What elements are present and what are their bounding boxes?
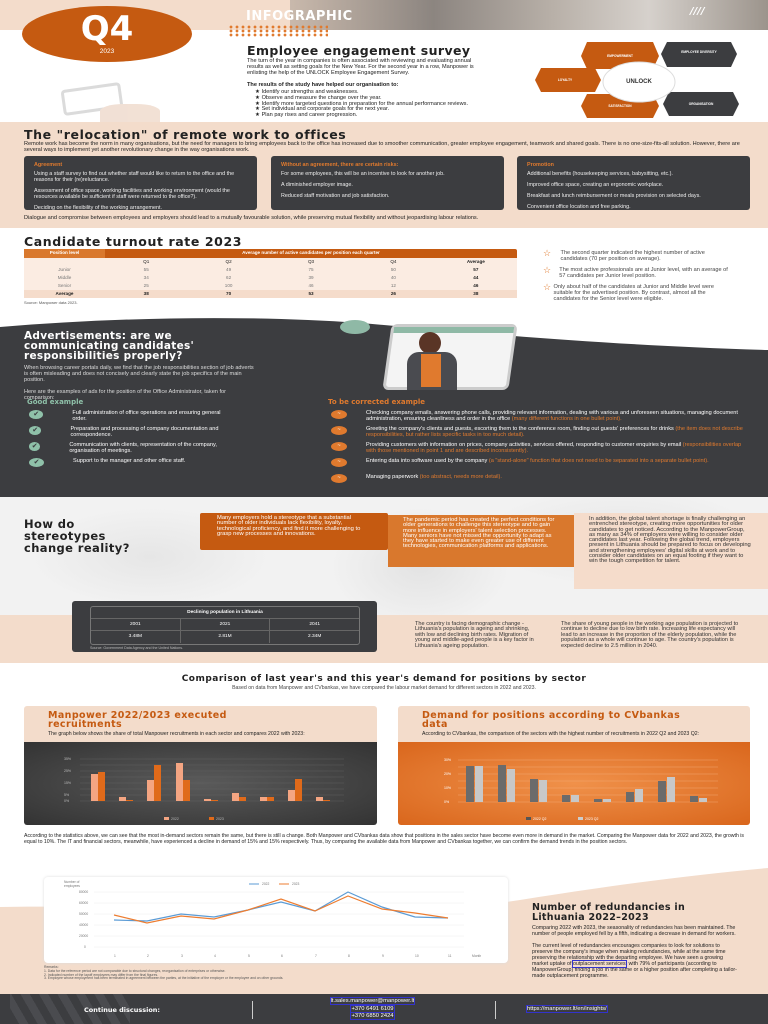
line chart card: 3 bbox=[181, 954, 183, 958]
dark wave section background bbox=[0, 318, 768, 497]
table: candidate turnout: 39 bbox=[308, 274, 314, 280]
stereotypes heading: change reality? bbox=[24, 541, 130, 555]
line chart card: 2022 bbox=[262, 882, 270, 886]
table: candidate turnout: Average number of active candidates per position each quarter bbox=[242, 250, 380, 255]
icon: phone with woman bbox=[340, 320, 517, 390]
table: candidate turnout: 100 bbox=[225, 282, 232, 288]
bar chart: cvbankas: 2022 Q2 bbox=[533, 817, 546, 821]
panel: declining population: Source: Government Data Agency and the United Nations. bbox=[90, 646, 183, 650]
panel: risks: For some employees, this will be an incentive to look for another job. bbox=[281, 171, 445, 177]
icon: divider 2 bbox=[495, 1001, 501, 1019]
panel: cvbankas chart: Demand for positions according to CVbankas data bbox=[422, 710, 680, 730]
hexagon diagram: UNLOCK bbox=[626, 79, 652, 85]
line chart card: 2 bbox=[147, 954, 149, 958]
line chart card: 4 bbox=[214, 954, 216, 958]
bar chart: manpower: 35% bbox=[64, 757, 71, 761]
table: candidate turnout: Q1 bbox=[143, 258, 149, 264]
comparison heading: Comparison of last year's and this year's demand for positions by sector bbox=[182, 674, 586, 684]
callout: stereotype 3 bbox=[574, 513, 768, 589]
table: candidate turnout: Average bbox=[56, 290, 73, 296]
callout: stereotype 1 bbox=[200, 513, 388, 550]
panel: declining population: 2041 bbox=[309, 622, 320, 627]
Q4 ellipse bbox=[22, 6, 192, 62]
line chart card: Number of bbox=[64, 880, 79, 884]
star notes bbox=[543, 248, 728, 302]
bar chart: cvbankas: 2023 Q2 bbox=[585, 817, 598, 821]
bar chart: cvbankas bbox=[398, 742, 750, 825]
bar chart: manpower: 0% bbox=[64, 799, 69, 803]
panel: manpower chart bbox=[24, 706, 377, 825]
line chart card: 5 bbox=[248, 954, 250, 958]
line chart card: 40000 bbox=[79, 923, 88, 927]
good example list: ✔ bbox=[32, 443, 38, 450]
line chart card: 8 bbox=[348, 954, 350, 958]
star notes: ☆ bbox=[543, 248, 551, 258]
ads text: Here are the examples of ads for the position of the Office Administrator, taken for comparison: bbox=[24, 389, 226, 401]
table: candidate turnout: 40 bbox=[391, 274, 396, 280]
survey text: ★ Identify our strengths and weaknesses. bbox=[255, 89, 359, 95]
candidate heading: Candidate turnout rate 2023 bbox=[24, 234, 242, 249]
contacts: +370 6850 2424 bbox=[351, 1013, 394, 1019]
survey text: ★ Set individual and corporate goals for the next year. bbox=[255, 106, 389, 112]
survey text: The turn of the year in companies is often associated with reviewing and evaluating annual results as well as setting goals for the New Year. For the second year in a row, Manpower is enlisting the help of the UNLOCK Employee Engagement Survey. bbox=[247, 58, 474, 76]
line chart card: employees bbox=[64, 884, 80, 888]
bar chart: cvbankas: 0% bbox=[444, 800, 449, 804]
panel: declining population: 2.34M bbox=[308, 634, 321, 639]
line chart card: 50000 bbox=[79, 912, 88, 916]
star notes: The most active professionals are at Junior level, with an average of 57 candidates per Junior level position. bbox=[559, 267, 728, 279]
table: candidate turnout: 53 bbox=[308, 290, 314, 296]
hexagon diagram: ORGANISATION bbox=[689, 102, 714, 106]
title: INFOGRAPHIC: INFOGRAPHIC bbox=[246, 9, 353, 24]
table: candidate turnout: 34 bbox=[144, 274, 149, 280]
panel: agreement: Using a staff survey to find out whether staff would like to return to the office and the reasons for their (re)reluctance. bbox=[34, 171, 234, 183]
bar chart: manpower: 25% bbox=[64, 769, 71, 773]
website link: https://manpower.lt/en/insights/ bbox=[527, 1006, 607, 1012]
table: candidate turnout: 38 bbox=[144, 290, 149, 296]
peach wave background bbox=[0, 868, 768, 994]
panel: declining population bbox=[72, 601, 377, 652]
corrected example list: Checking company emails, answering phone calls, providing relevant information, dealing with various and unforeseen situations, managing document administration, ensuring cleanliness and order in the office (many different functions in one bullet point). bbox=[366, 410, 738, 422]
survey heading: Employee engagement survey bbox=[247, 43, 470, 58]
survey text: The results of the study have helped our organisation to: bbox=[247, 82, 398, 88]
Q4 ellipse: Q4 bbox=[81, 9, 133, 49]
table: candidate turnout: 44 bbox=[473, 274, 478, 280]
line chart card bbox=[44, 877, 508, 963]
bar chart: cvbankas: 20% bbox=[444, 772, 451, 776]
good example list: ✔ bbox=[34, 459, 39, 466]
panel: risks: A diminished employer image. bbox=[281, 182, 353, 188]
star notes: Only about half of the candidates at Junior and Middle level were suitable for the advertised position. By contrast, almost all the candidates for the Senior level were eligible. bbox=[554, 284, 714, 302]
corrected example list: Managing paperwork (too abstract, needs more detail). bbox=[366, 474, 502, 480]
stereotypes heading bbox=[24, 517, 130, 555]
stereotypes heading: How do bbox=[24, 517, 75, 531]
Q4 ellipse: 2023 bbox=[100, 48, 114, 55]
header photo bbox=[290, 0, 768, 30]
good example heading: Good example bbox=[27, 398, 83, 406]
peach band bbox=[0, 615, 768, 663]
logo: //// bbox=[690, 6, 705, 17]
star notes: The second quarter indicated the highest number of active candidates (70 per position on average). bbox=[561, 250, 705, 262]
redundancies text: The current level of redundancies encourages companies to look for solutions to preserve the company's image when making redundancies, while at the same time preserving the relationship with the departing employee. We have seen a growing market uptake of outplacement services, with 79% of participants (according to ManpowerGroup) finding a job in the same or a higher position after completing a tailor-made outplacement programme. bbox=[532, 943, 737, 979]
relocation intro: Remote work has become the norm in many organisations, but the need for managers to bring employees back to the office has increased due to smoother communication, greater employee engagement, teamwork and shared goals. There is no one-size-fits-all solution. However, there are several ways to implement yet another revolutionary change in the way organisations work. bbox=[24, 141, 740, 153]
icon: divider 1 bbox=[252, 1001, 258, 1019]
chart remarks: Remarks: bbox=[44, 965, 59, 969]
corrected example list: ~ bbox=[337, 427, 341, 433]
table: candidate turnout: Average bbox=[467, 258, 485, 264]
line chart card: 20000 bbox=[79, 934, 88, 938]
panel: cvbankas chart bbox=[398, 706, 750, 825]
survey text: ★ Identify more targeted questions in preparation for the annual performance reviews. bbox=[255, 101, 468, 107]
icon: tablet hand bbox=[61, 82, 160, 122]
line chart card: 1 bbox=[114, 954, 116, 958]
panel: cvbankas chart: According to CVbankas, the comparison of the sectors with the highest number of recruitments in 2022 Q2 and 2023 Q2: bbox=[422, 731, 699, 737]
good example list bbox=[29, 410, 221, 467]
chart remarks: 2. Indicated number of the layoff employees may differ from the final figures. bbox=[44, 973, 158, 977]
line chart card: Month bbox=[472, 954, 481, 958]
table: candidate turnout: 62 bbox=[226, 274, 231, 280]
table: candidate turnout: 26 bbox=[391, 290, 396, 296]
line chart card: 10 bbox=[415, 954, 419, 958]
table: candidate turnout: 25 bbox=[144, 282, 149, 288]
panel: declining population: 3.48M bbox=[129, 634, 142, 639]
line chart card: 0 bbox=[84, 945, 86, 949]
chart remarks: 1. Data for the reference period are not comparable due to structural changes, reorganisation of enterprises or otherwise. bbox=[44, 969, 226, 973]
table: candidate turnout: Q3 bbox=[308, 258, 314, 264]
bar chart: cvbankas: 10% bbox=[444, 786, 451, 790]
panel: declining population: 2021 bbox=[220, 622, 230, 627]
table: candidate turnout: Senior bbox=[58, 282, 71, 288]
corrected example heading: To be corrected example bbox=[328, 398, 425, 406]
decorative dots bbox=[228, 25, 328, 37]
table: candidate turnout: 38 bbox=[473, 290, 478, 296]
table: candidate turnout bbox=[24, 249, 517, 305]
ads heading: Advertisements: are we communicating candidates' responsibilities properly? bbox=[24, 330, 194, 362]
table: candidate turnout: 46 bbox=[308, 282, 314, 288]
panel: agreement bbox=[24, 156, 257, 210]
bar chart: manpower: 2023 bbox=[216, 817, 224, 821]
comparison subtitle: Based on data from Manpower and CVbankas, we have compared the labour market demand for different sectors in 2022 and 2023. bbox=[232, 685, 536, 691]
line chart card: 11 bbox=[448, 954, 452, 958]
footer decoration bbox=[10, 994, 130, 1024]
callout: stereotype 1: Many employers hold a stereotype that a substantial number of older individuals lack flexibility, loyalty, technological proficiency, and find it more challenging to grasp new processes and innovations. bbox=[217, 515, 360, 537]
table: candidate turnout: 55 bbox=[144, 266, 149, 272]
line chart card: 60000 bbox=[79, 901, 88, 905]
star notes: ☆ bbox=[543, 265, 551, 275]
bar chart: cvbankas: 30% bbox=[444, 758, 451, 762]
redundancies text: Comparing 2022 with 2023, the seasonality of redundancies has been maintained. The number of people employed fell by a fifth, indicating a decrease in demand for workers. bbox=[532, 925, 736, 937]
good example list: Communication with clients, representation of the company, organisation of meetings. bbox=[69, 442, 217, 454]
corrected example list: Providing customers with information on prices, company activities, services offered, responding to customer enquiries by email (responsibilities overlap with those mentioned in point 1 and are described inconsistently). bbox=[366, 442, 741, 454]
bar chart: manpower bbox=[24, 742, 377, 825]
corrected example list: ~ bbox=[337, 443, 341, 449]
ads text bbox=[24, 365, 254, 401]
redundancies text bbox=[532, 925, 737, 979]
stereotypes heading: stereotypes bbox=[24, 529, 106, 543]
panel: risks: Reduced staff motivation and job satisfaction. bbox=[281, 193, 389, 199]
corrected example list: Greeting the company's clients and guests, escorting them to the conference room, finding out guests' preferences for drinks (the item does not describe responsibilities, but rather lists specific tasks in too much detail). bbox=[366, 426, 743, 438]
panel: agreement: Deciding on the flexibility of the working arrangement. bbox=[34, 205, 162, 211]
panel: promotion: Promotion bbox=[527, 162, 554, 168]
panel: declining population: Declining population in Lithuania bbox=[187, 610, 263, 615]
contacts: +370 6491 6109 bbox=[351, 1006, 394, 1012]
redundancies heading: Number of redundancies in Lithuania 2022–2023 bbox=[532, 902, 685, 923]
bar chart: manpower: 2022 bbox=[171, 817, 179, 821]
hexagon diagram: EMPLOYEE DIVERSITY bbox=[681, 50, 718, 54]
hexagon diagram: LOYALTY bbox=[558, 78, 573, 82]
table: candidate turnout: 12 bbox=[391, 282, 396, 288]
contacts: lt.sales.manpower@manpower.lt bbox=[331, 998, 414, 1004]
hexagon diagram bbox=[535, 42, 739, 118]
good example list: Full administration of office operations and ensuring general order. bbox=[72, 410, 221, 422]
panel: promotion: Improved office space, creating an ergonomic workplace. bbox=[527, 182, 663, 188]
relocation heading: The "relocation" of remote work to offices bbox=[24, 127, 346, 142]
line chart card: 7 bbox=[315, 954, 317, 958]
table: candidate turnout: Position level bbox=[50, 250, 79, 255]
header photo band bbox=[0, 0, 768, 30]
line chart card: 6 bbox=[281, 954, 283, 958]
callout: stereotype 2: The pandemic period has created the perfect conditions for older generations to challenge this stereotype and to gain more influence in employers' talent selection processes. Many seniors have not missed the opportunity to adapt as they have started to make even greater use of different technologies, communication platforms and applications. bbox=[403, 517, 554, 549]
good example list: Preparation and processing of company documentation and correspondence. bbox=[70, 426, 218, 438]
hexagon diagram: EMPOWERMENT bbox=[607, 54, 633, 58]
panel: agreement: Assessment of office space, working facilities and working environment (would the resources available be sufficient if staff were returned to the office?). bbox=[34, 188, 230, 200]
table: candidate turnout: 70 bbox=[226, 290, 231, 296]
table: candidate turnout: Q2 bbox=[226, 258, 232, 264]
table: candidate turnout: 75 bbox=[308, 266, 314, 272]
good example list: Support to the manager and other office staff. bbox=[73, 458, 185, 464]
continue discussion: Continue discussion: bbox=[84, 1006, 160, 1014]
hexagon diagram: SATISFACTION bbox=[608, 104, 632, 108]
good example list: ✔ bbox=[32, 427, 38, 434]
panel: relocation section background bbox=[0, 122, 768, 228]
survey text: ★ Observe and measure the change over the year. bbox=[255, 95, 382, 101]
callout: stereotype 3: In addition, the global talent shortage is finally challenging an entrenched stereotype, creating more opportunities for older candidates to get noticed. According to the ManpowerGroup, as many as 34% of employers were willing to consider older candidates last year. Following the global trend, employers present in Lithuania should be prepared to focus on developing and strengthening employees' digital skills at work and to consider older candidates on an equal footing if they want to win the tough competition for talent. bbox=[589, 516, 751, 564]
line chart card: 9 bbox=[382, 954, 384, 958]
panel: manpower chart: The graph below shows the share of total Manpower recruitments in each sector and compares 2022 with 2023: bbox=[48, 731, 305, 737]
panel: risks: Without an agreement, there are certain risks: bbox=[281, 162, 398, 168]
panel: declining population: 2001 bbox=[130, 622, 141, 627]
contacts bbox=[330, 997, 415, 1020]
panel: promotion: Additional benefits (housekeeping services, babysitting, etc.). bbox=[527, 171, 673, 177]
survey text: ★ Plan pay rises and career progression. bbox=[255, 112, 357, 118]
table: candidate turnout: Middle bbox=[58, 274, 71, 280]
corrected example list: ~ bbox=[337, 411, 341, 417]
table: candidate turnout: Junior bbox=[58, 266, 71, 272]
table: candidate turnout: 46 bbox=[473, 282, 478, 288]
corrected example list: ~ bbox=[337, 475, 341, 481]
world map background bbox=[0, 497, 768, 615]
corrected example list: Entering data into software used by the company (a "stand-alone" function that does not need to be separated into a separate bullet point). bbox=[366, 458, 709, 464]
chart remarks bbox=[44, 965, 283, 980]
good example list: ✔ bbox=[33, 411, 39, 418]
line chart card: 2023 bbox=[292, 882, 300, 886]
corrected example list bbox=[331, 410, 743, 483]
population text 1: The country is facing demographic change - Lithuania's population is ageing and shrinking, with low and declining birth rates. Migration of young and middle-aged people is a key factor in Lithuania's ageing population. bbox=[415, 621, 534, 649]
panel: risks bbox=[271, 156, 504, 210]
bar chart: manpower: 5% bbox=[64, 793, 69, 797]
table: candidate turnout: 50 bbox=[391, 266, 396, 272]
corrected example list: ~ bbox=[337, 459, 341, 465]
table: candidate turnout: 49 bbox=[226, 266, 231, 272]
line chart card: 80000 bbox=[79, 890, 88, 894]
panel: declining population: 2.81M bbox=[218, 634, 232, 639]
ads text: When browsing career portals daily, we find that the job responsibilities section of job adverts is often misleading and does not concisely and clearly state the job specifics of the main position. bbox=[24, 365, 254, 383]
population text 2: The share of young people in the working age population is projected to continue to decline due to low birth rate. Increasing life expectancy will lead to an increase in the proportion of the elderly population, while the population as a whole will continue to age. The country's population is expected decline to 2.5 million in 2040. bbox=[561, 621, 738, 649]
chart remarks: 3. Employee whose employment has been terminated in agreement between the parties, at the initiative of the employer or the employee and on other grounds. bbox=[44, 976, 283, 980]
table: candidate turnout: Source: Manpower data 2023. bbox=[24, 300, 78, 304]
comparison conclusion: According to the statistics above, we can see that the most in-demand sectors remain the same, but there is still a change. Both Manpower and CVbankas data show that positions in the sales sector have become even more in demand in the market. Comparing the Manpower data for 2022 and 2023, the growth is equal to 10%. The IT and financial sectors, meanwhile, have experienced a decline in demand of 15% and 15% respectively. Thus, by comparing the available data from Manpower and CVbankas together, we can confirm the demand trends in the position sectors. bbox=[24, 833, 744, 845]
panel: promotion: Breakfast and lunch reimbursement or meals provision on selected days. bbox=[527, 193, 701, 199]
star notes: ☆ bbox=[543, 282, 551, 292]
callout: stereotype 2 bbox=[388, 515, 576, 567]
bar chart: manpower: 15% bbox=[64, 781, 71, 785]
survey text bbox=[247, 58, 474, 118]
panel: agreement: Agreement bbox=[34, 162, 62, 168]
relocation conclusion: Dialogue and compromise between employees and employers should lead to a mutually favourable solution, while preserving mutual flexibility and without jeopardising labour relations. bbox=[24, 215, 478, 221]
table: candidate turnout: Q4 bbox=[390, 258, 396, 264]
panel: promotion bbox=[517, 156, 750, 210]
panel: manpower chart: Manpower 2022/2023 executed recruitments bbox=[48, 710, 227, 730]
panel: promotion: Convenient office location and free parking. bbox=[527, 204, 631, 210]
footer bbox=[0, 994, 768, 1024]
table: candidate turnout: 57 bbox=[473, 266, 478, 272]
